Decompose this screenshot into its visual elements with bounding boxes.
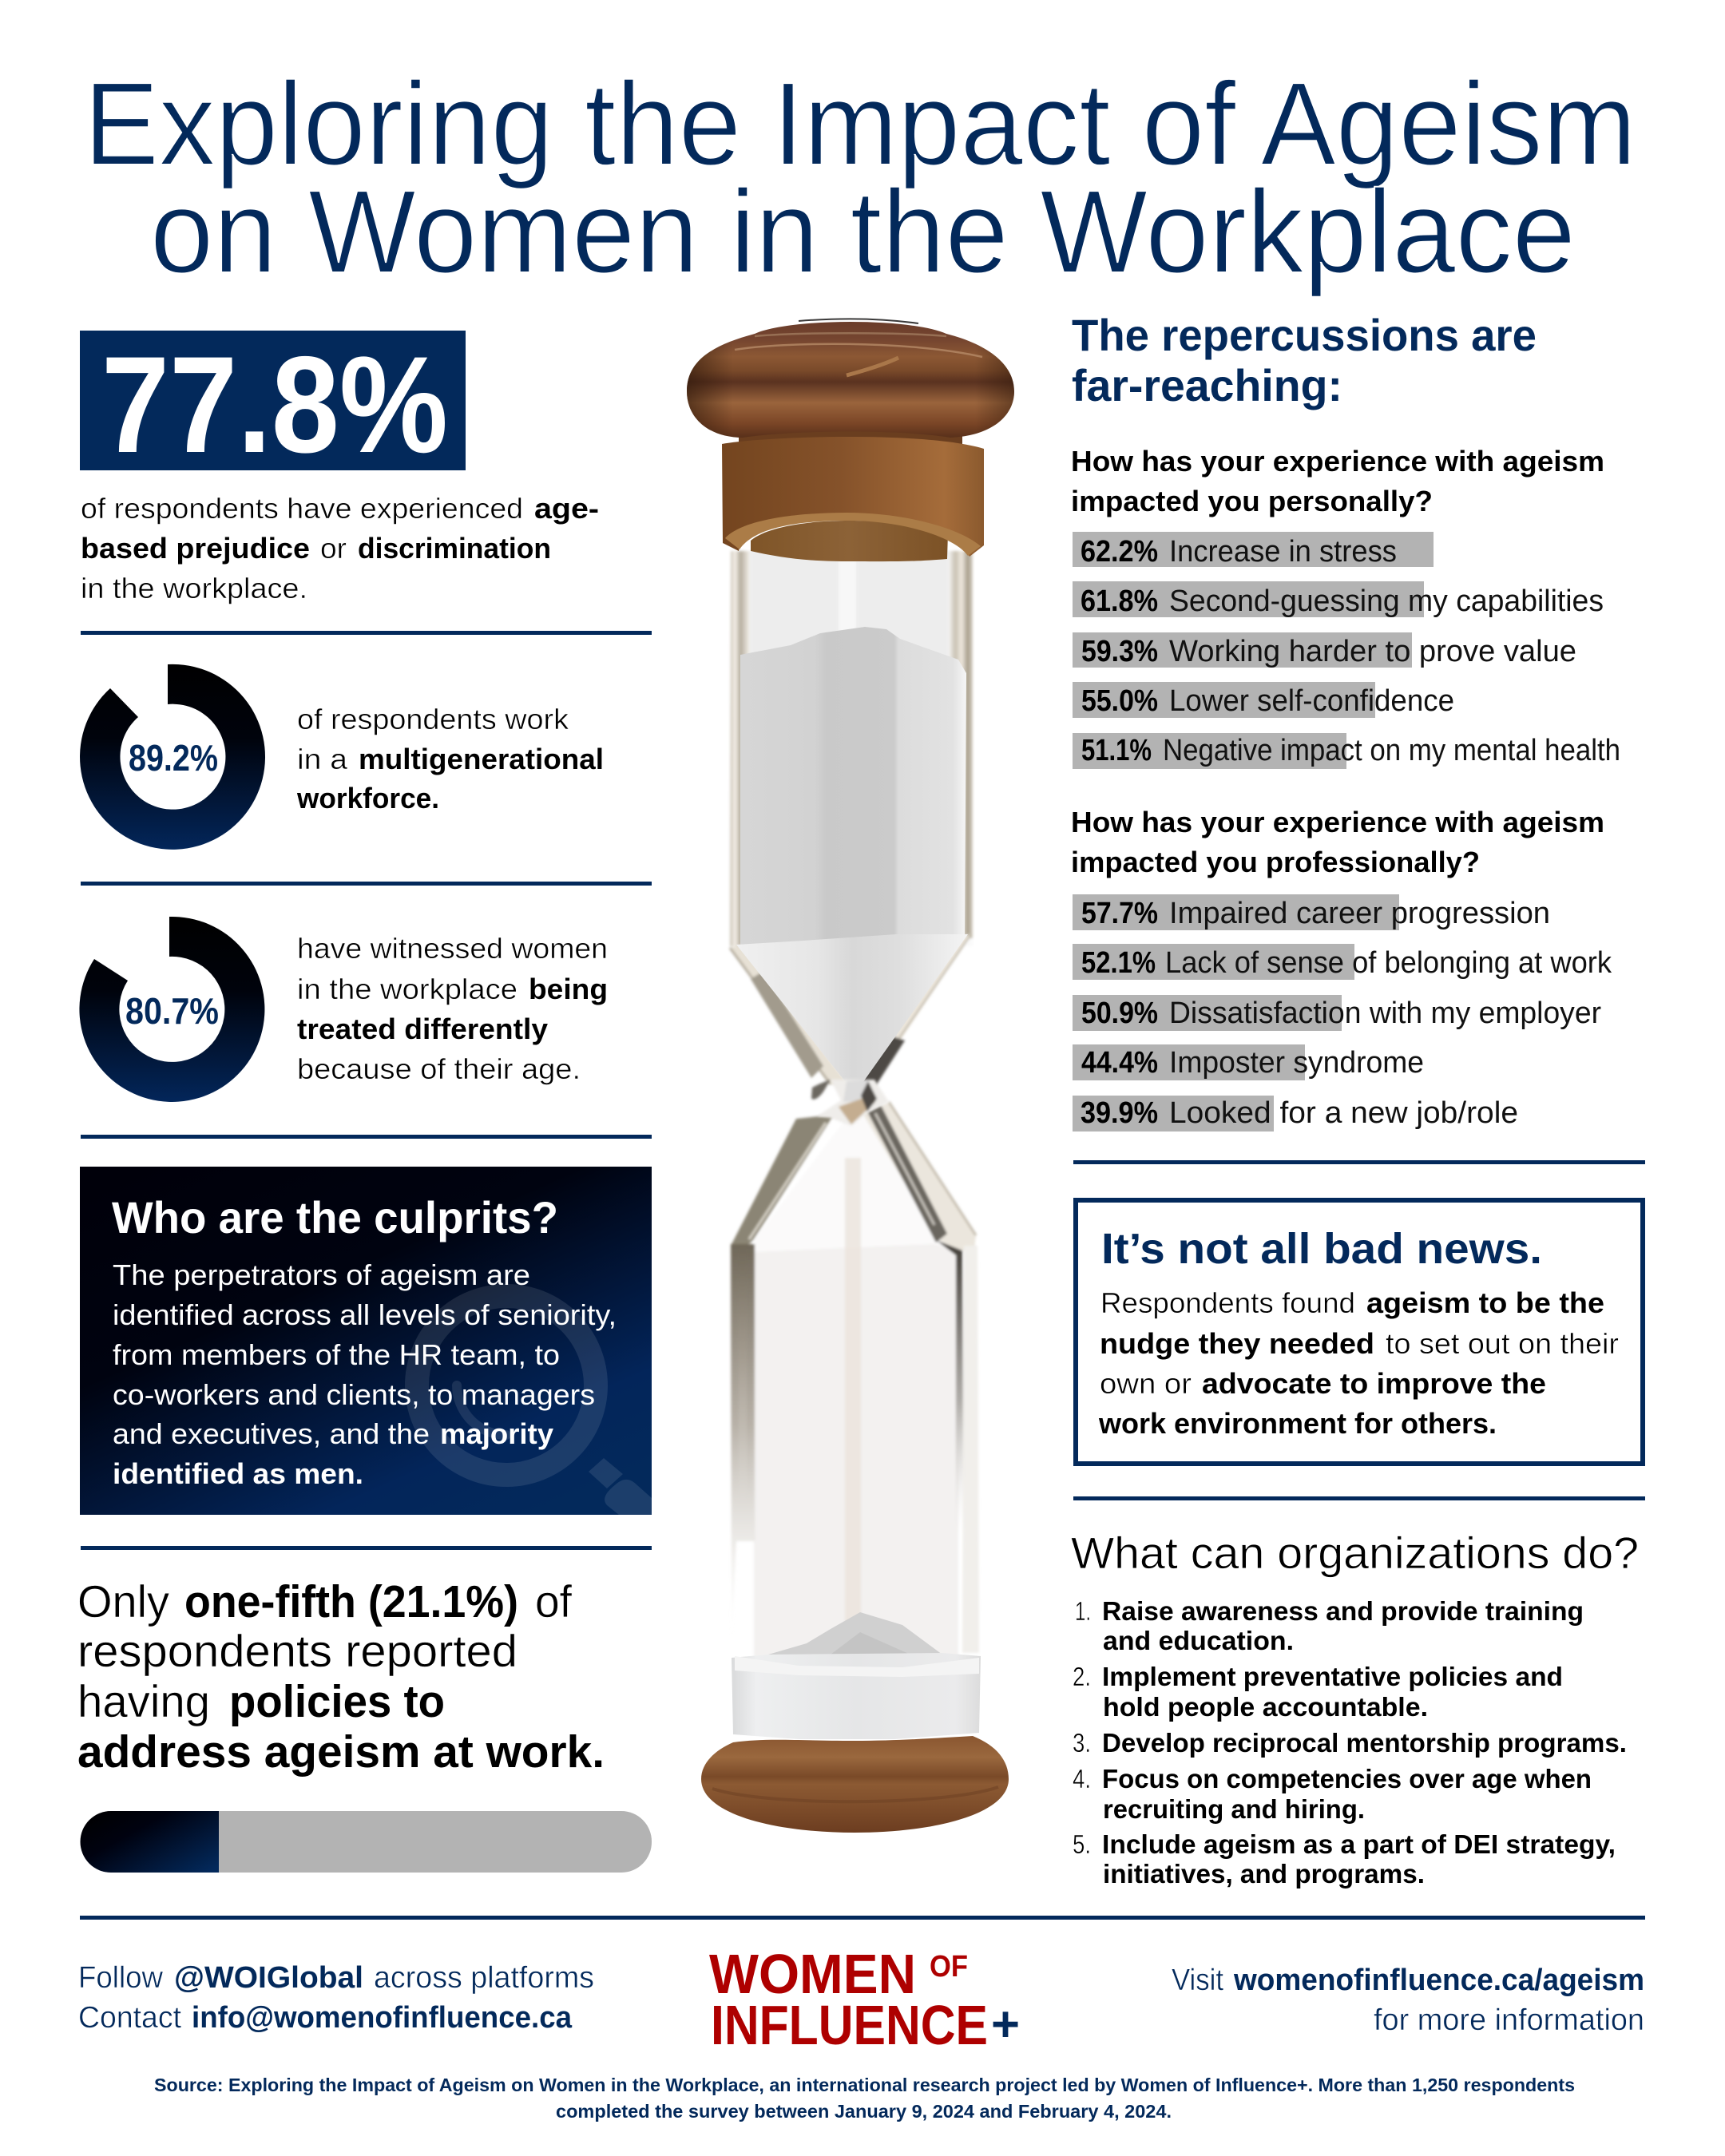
bar chart: professional impact: 44.4% — [1081, 1046, 1158, 1080]
panel body text: co-workers and clients, to managers — [113, 1378, 595, 1411]
panel body text — [113, 1258, 617, 1490]
bar chart: personal impact: Lower self-confidence — [1169, 684, 1454, 718]
footer: follow and contact: info@womenofinfluence.ca — [192, 2001, 573, 2035]
stat text: experienced prejudice: or — [320, 532, 347, 565]
numbered list: recommendations: and education. — [1103, 1626, 1294, 1655]
logo: Women of Influence+: OF — [930, 1950, 968, 1984]
stat text: one-fifth have policies: of — [535, 1576, 572, 1627]
footer: follow and contact: Contact — [78, 2001, 181, 2035]
numbered list: recommendations: Raise awareness and provide training — [1102, 1596, 1584, 1626]
footer: follow and contact: @WOIGlobal — [174, 1961, 363, 1995]
bar chart: personal impact: Increase in stress — [1169, 535, 1397, 569]
bar chart: personal impact: Working harder to prove value — [1169, 635, 1576, 668]
stat text: one-fifth have policies: respondents reported — [77, 1626, 518, 1677]
stat text: multigenerational workforce: workforce. — [296, 782, 439, 814]
numbered list: recommendations: 1. — [1075, 1596, 1091, 1626]
bar chart: personal impact: 51.1% — [1081, 734, 1152, 767]
footer: follow and contact — [78, 1961, 594, 2035]
hourglass upper sand — [736, 627, 968, 1085]
bar chart: professional impact: Lack of sense of belonging at work — [1165, 946, 1612, 980]
stat text: one-fifth have policies: one-fifth (21.1%) — [184, 1576, 518, 1627]
logo: Women of Influence+ — [709, 1943, 1020, 2056]
title: on Women in the Workplace — [150, 166, 1576, 298]
hourglass lower sand — [768, 1612, 942, 1655]
heading: what can organizations do: What can organizations do? — [1071, 1528, 1639, 1578]
stat text: multigenerational workforce: multigenerational — [359, 743, 604, 775]
logo: Women of Influence+: + — [991, 1997, 1020, 2052]
stat highlight: 77.8%: 77.8% — [101, 328, 448, 482]
numbered list: recommendations: Implement preventative policies and — [1102, 1662, 1563, 1691]
bar chart: personal impact — [1073, 532, 1620, 769]
bar chart: personal impact: 55.0% — [1081, 684, 1158, 718]
panel body text: identified across all levels of seniority, — [113, 1298, 617, 1331]
panel body text: nudge they needed — [1100, 1327, 1374, 1360]
bar chart: professional impact: 57.7% — [1081, 897, 1158, 930]
numbered list: recommendations: recruiting and hiring. — [1103, 1794, 1365, 1824]
numbered list: recommendations: 2. — [1073, 1662, 1091, 1691]
numbered list: recommendations: 3. — [1073, 1728, 1091, 1758]
hourglass white base — [732, 1653, 981, 1739]
footer: visit website: womenofinfluence.ca/ageism — [1233, 1964, 1644, 1997]
bar chart: personal impact: 61.8% — [1081, 585, 1158, 618]
bar chart: professional impact: 39.9% — [1081, 1096, 1158, 1130]
donut chart: 89.2%: 89.2% — [129, 737, 218, 779]
numbered list: recommendations: Focus on competencies over age when — [1102, 1764, 1592, 1793]
numbered list: recommendations: Develop reciprocal mentorship programs. — [1102, 1728, 1627, 1758]
numbered list: recommendations: hold people accountable. — [1103, 1692, 1428, 1722]
heading: the repercussions — [1072, 310, 1537, 410]
stat text: one-fifth have policies: having — [77, 1676, 210, 1727]
footer: visit website: for more information — [1374, 2003, 1644, 2037]
donut chart: 80.7%: 80.7% — [125, 990, 219, 1032]
bar chart: professional impact: Looked for a new job/role — [1169, 1096, 1518, 1130]
bar chart: professional impact — [1073, 894, 1612, 1132]
stat text: treated differently: have witnessed women — [297, 932, 608, 965]
stat text: multigenerational workforce: in a — [297, 743, 348, 775]
hourglass illustration — [687, 319, 1014, 1833]
stat text: one-fifth have policies: policies to — [229, 1676, 445, 1727]
panel body text: to set out on their — [1386, 1327, 1619, 1360]
panel body text: advocate to improve the — [1202, 1367, 1546, 1400]
title — [84, 58, 1636, 298]
logo: Women of Influence+: INFLUENCE — [711, 1994, 988, 2056]
heading: the repercussions: far-reaching: — [1072, 360, 1342, 410]
donut chart: 89.2% — [80, 664, 265, 850]
numbered list: recommendations: initiatives, and programs. — [1103, 1859, 1425, 1888]
question: professional impact: How has your experience with ageism — [1071, 806, 1604, 838]
footer: visit website — [1172, 1964, 1644, 2037]
stat text: multigenerational workforce — [296, 703, 604, 814]
heading: the repercussions: The repercussions are — [1072, 310, 1537, 360]
icon: magnifying glass watermark — [417, 1296, 652, 1515]
title: Exploring the Impact of Ageism — [84, 58, 1636, 190]
panel body text: from members of the HR team, to — [113, 1338, 560, 1371]
source note: completed the survey between January 9, 2024 and February 4, 2024. — [556, 2101, 1172, 2122]
stat text: treated differently: being — [529, 973, 608, 1005]
bar chart: personal impact: Second-guessing my capabilities — [1169, 585, 1604, 618]
bar chart: professional impact: 50.9% — [1081, 997, 1158, 1030]
stat text: experienced prejudice: of respondents have experienced — [81, 492, 523, 525]
panel: not all bad news — [1076, 1200, 1643, 1464]
panel body text: majority — [440, 1417, 553, 1450]
hourglass neck — [811, 1080, 889, 1126]
stat text: experienced prejudice: in the workplace. — [81, 572, 307, 604]
question: professional impact: impacted you professionally? — [1071, 846, 1480, 878]
bar chart: personal impact: 62.2% — [1081, 535, 1158, 569]
panel body text — [1098, 1286, 1619, 1440]
stat text: treated differently — [297, 932, 608, 1085]
stat text: experienced prejudice: age- — [534, 492, 599, 525]
donut chart: 80.7% — [79, 917, 264, 1102]
source note — [154, 2075, 1575, 2122]
panel body text: work environment for others. — [1098, 1407, 1497, 1440]
bar chart: professional impact: Dissatisfaction with my employer — [1169, 997, 1601, 1030]
footer: visit website: Visit — [1172, 1964, 1223, 1997]
panel heading: Who are the culprits? — [112, 1192, 558, 1242]
bar chart: professional impact: 52.1% — [1081, 946, 1156, 980]
question: personal impact: impacted you personally? — [1071, 485, 1433, 517]
hourglass collar — [722, 423, 984, 561]
question: professional impact — [1071, 806, 1604, 878]
source note: Source: Exploring the Impact of Ageism on Women in the Workplace, an international research project led by Women of Influence+. More than 1,250 respondents — [154, 2075, 1575, 2095]
stat text: experienced prejudice: based prejudice — [81, 532, 310, 565]
numbered list: recommendations: Include ageism as a part of DEI strategy, — [1102, 1829, 1616, 1859]
panel: who are the culprits — [80, 1167, 652, 1515]
question: personal impact: How has your experience with ageism — [1071, 445, 1604, 478]
bar chart: personal impact: 59.3% — [1081, 635, 1158, 668]
numbered list: recommendations: 4. — [1073, 1764, 1091, 1793]
bar chart: professional impact: Imposter syndrome — [1169, 1046, 1424, 1080]
numbered list: recommendations — [1073, 1596, 1627, 1888]
stat text: treated differently: treated differently — [297, 1013, 548, 1045]
stat text: one-fifth have policies: address ageism at work. — [77, 1726, 605, 1778]
hourglass cap — [687, 319, 1014, 438]
numbered list: recommendations: 5. — [1073, 1829, 1091, 1859]
stat text: multigenerational workforce: of respondents work — [297, 703, 569, 735]
footer: follow and contact: Follow — [78, 1961, 164, 1995]
hourglass upper bulb glass — [730, 551, 973, 1094]
panel body text: Respondents found — [1100, 1286, 1355, 1319]
bar chart: professional impact: Impaired career progression — [1169, 897, 1550, 930]
stat text: one-fifth have policies — [77, 1576, 605, 1778]
question: personal impact — [1071, 445, 1604, 517]
hourglass lower bulb glass — [731, 1102, 979, 1657]
progress bar: 21.1% — [80, 1811, 652, 1873]
bar chart: personal impact: Negative impact on my mental health — [1163, 734, 1620, 767]
logo: Women of Influence+: WOMEN — [709, 1943, 916, 2005]
panel body text: ageism to be the — [1366, 1286, 1604, 1319]
panel body text: own or — [1100, 1367, 1192, 1400]
stat text: treated differently: in the workplace — [297, 973, 518, 1005]
footer: follow and contact: across platforms — [374, 1961, 594, 1995]
hourglass wooden base — [701, 1736, 1009, 1833]
stat text: experienced prejudice — [81, 492, 599, 604]
panel heading: It’s not all bad news. — [1101, 1225, 1542, 1273]
stat text: experienced prejudice: discrimination — [358, 532, 551, 565]
stat text: treated differently: because of their age. — [297, 1052, 581, 1085]
panel body text: and executives, and the — [113, 1417, 430, 1450]
stat text: one-fifth have policies: Only — [77, 1576, 169, 1627]
panel body text: The perpetrators of ageism are — [113, 1258, 530, 1291]
panel body text: identified as men. — [113, 1457, 363, 1490]
